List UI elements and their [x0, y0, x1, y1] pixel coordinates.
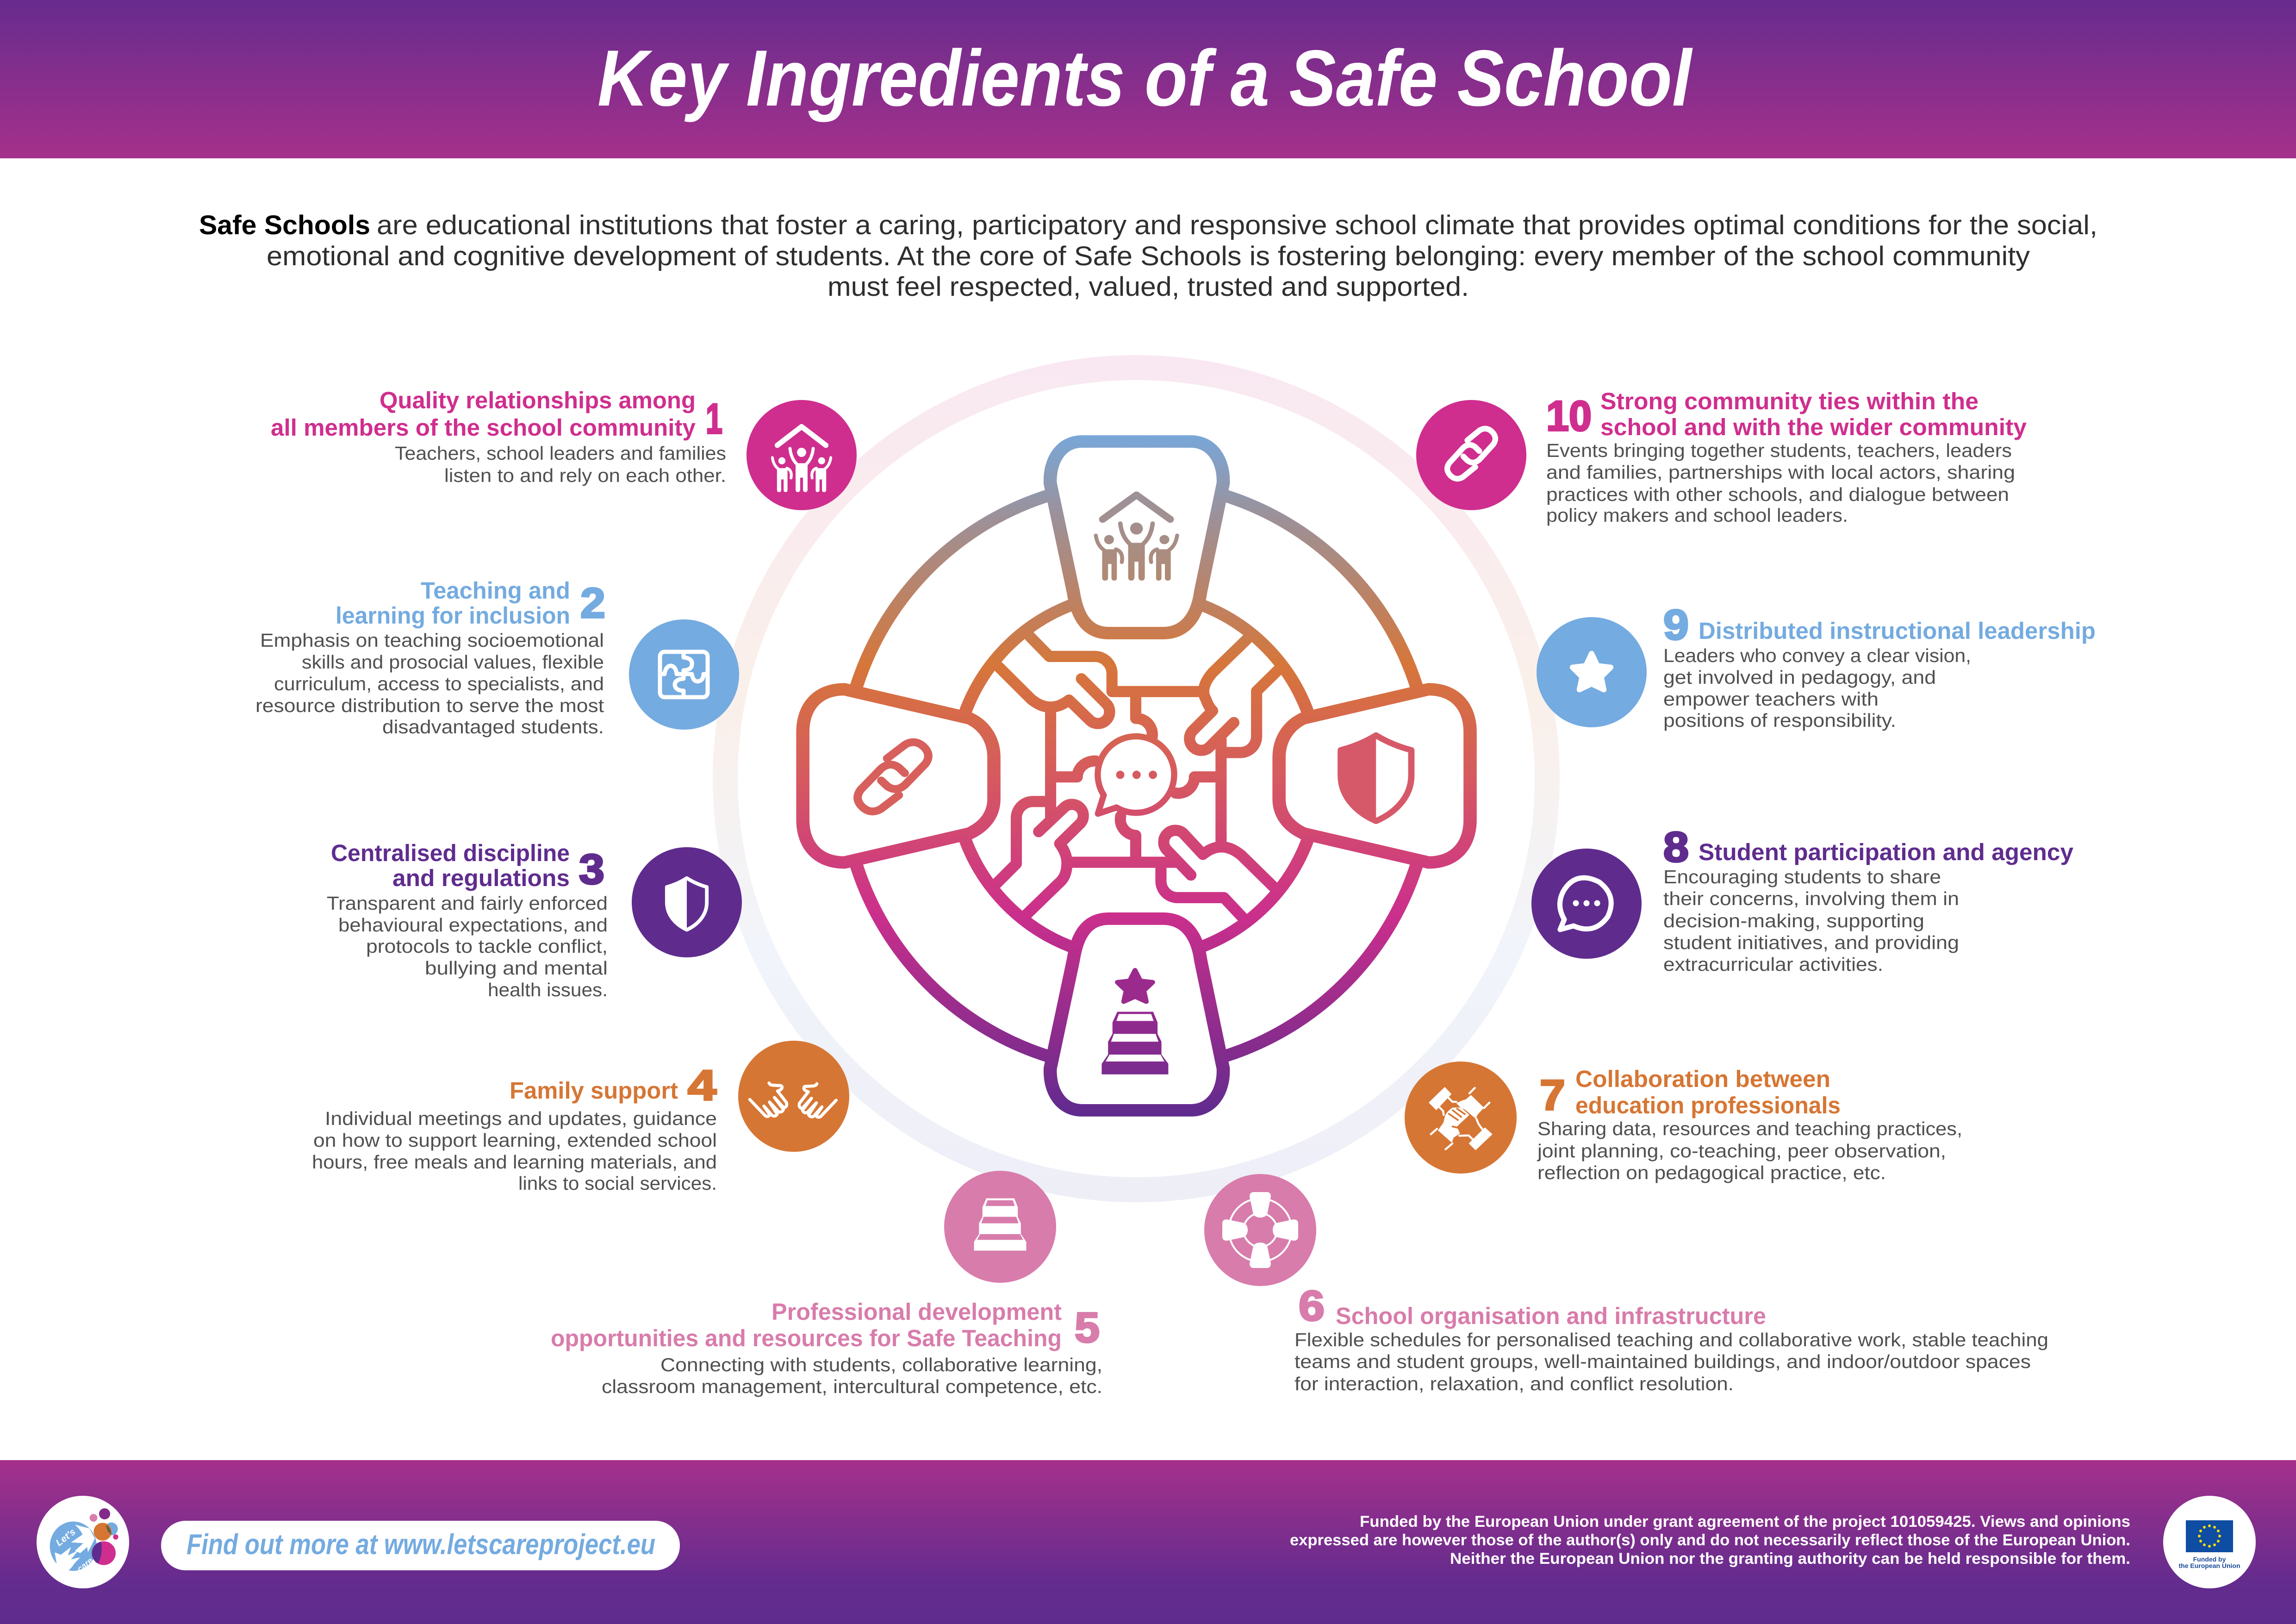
heading 5: 5	[1075, 1304, 1100, 1351]
lifebuoy rings	[842, 482, 1431, 1070]
text 1: listen to and rely on each other.	[444, 465, 726, 486]
text 9: Leaders who convey a clear vision,	[1663, 645, 1971, 666]
text 6: for interaction, relaxation, and conflict resolution.	[1294, 1373, 1734, 1394]
item 7	[1405, 1062, 1962, 1183]
icon circle 2: puzzle	[629, 619, 739, 730]
heading 6: 6	[1299, 1282, 1325, 1330]
item 4	[312, 1041, 849, 1194]
heading 9	[1663, 601, 2096, 649]
text 3: protocols to tackle conflict,	[366, 936, 608, 957]
heading 5: Professional development	[772, 1299, 1062, 1325]
icon: people under roof	[1096, 495, 1177, 581]
text 4: Individual meetings and updates, guidance	[325, 1108, 717, 1129]
heading 9: Distributed instructional leadership	[1699, 618, 2096, 644]
text 8: decision-making, supporting	[1663, 910, 1924, 931]
icon: chain link	[858, 742, 928, 812]
item 10	[1416, 388, 2027, 526]
icon: star	[1117, 970, 1153, 1002]
central puzzle with four hands	[997, 637, 1278, 918]
text 7	[1537, 1118, 1962, 1183]
heading 10	[1546, 388, 2027, 440]
EU emblem: the European Union	[2179, 1562, 2240, 1569]
heading 8	[1663, 824, 2074, 871]
heading 4: 4	[688, 1062, 716, 1109]
text 4: links to social services.	[518, 1173, 717, 1194]
card: bottom	[1050, 918, 1223, 1110]
funding disclaimer: expressed are however those of the author(s) only and do not necessarily reflect those of the European Union.	[1290, 1531, 2130, 1549]
text 7: Sharing data, resources and teaching practices,	[1537, 1118, 1962, 1139]
card: right	[1279, 689, 1470, 862]
icon circle 1	[747, 400, 857, 510]
card: left	[803, 689, 994, 862]
heading 10: 10	[1546, 393, 1592, 440]
heading 2: 2	[580, 580, 605, 627]
heading 8: Student participation and agency	[1699, 839, 2074, 865]
text 2	[255, 630, 604, 737]
text 9	[1663, 645, 1971, 731]
text 9: positions of responsibility.	[1663, 710, 1896, 731]
text 6: teams and student groups, well-maintained buildings, and indoor/outdoor spaces	[1294, 1351, 2031, 1372]
text 4: hours, free meals and learning materials, and	[312, 1151, 717, 1173]
heading 1: all members of the school community	[271, 414, 696, 441]
EU emblem: Funded by	[2193, 1555, 2226, 1563]
heading 7	[1540, 1066, 1841, 1119]
text 10: Events bringing together students, teachers, leaders	[1546, 440, 2012, 461]
text 2: skills and prosocial values, flexible	[302, 651, 604, 673]
item 1	[271, 387, 857, 510]
text 8: extracurricular activities.	[1663, 954, 1883, 975]
project logo: Let's	[54, 1526, 78, 1549]
card: top	[1050, 442, 1223, 633]
text 10: policy makers and school leaders.	[1546, 505, 1848, 526]
heading 2: Teaching and	[421, 577, 570, 604]
text 3: Transparent and fairly enforced	[327, 893, 608, 914]
website pill: Find out more at www.letscareproject.eu	[187, 1529, 655, 1561]
heading 4	[510, 1062, 716, 1109]
heading 6: School organisation and infrastructure	[1336, 1303, 1766, 1329]
icon circle 7: joined hands	[1405, 1062, 1517, 1174]
EU emblem	[2163, 1496, 2256, 1588]
text 2: Emphasis on teaching socioemotional	[260, 630, 604, 651]
text 8: Encouraging students to share	[1663, 866, 1941, 887]
icon circle 8: speech bubble	[1531, 849, 1642, 959]
icon circle 4: hands	[738, 1041, 849, 1152]
text 8: student initiatives, and providing	[1663, 932, 1959, 953]
heading 3: and regulations	[392, 865, 570, 891]
item 9	[1537, 601, 2096, 731]
icon: stairs	[1101, 1012, 1168, 1074]
footer band	[0, 1460, 2296, 1624]
heading 8: 8	[1663, 824, 1689, 871]
text 4	[312, 1108, 717, 1194]
heading 10: Strong community ties within the	[1600, 388, 1979, 414]
text 3: health issues.	[488, 979, 608, 1000]
heading 7: 7	[1540, 1072, 1565, 1119]
intro paragraph: emotional and cognitive development of students. At the core of Safe Schools is fostering belonging: every member of the school community	[267, 241, 2030, 271]
text 1	[395, 443, 726, 486]
text 3: behavioural expectations, and	[338, 914, 608, 936]
heading 10: school and with the wider community	[1600, 414, 2027, 440]
text 8	[1663, 866, 1959, 975]
text 9: get involved in pedagogy, and	[1663, 667, 1936, 688]
icon: shield	[1341, 735, 1411, 821]
text 3	[327, 893, 608, 1000]
project logo: care	[75, 1556, 94, 1574]
project logo	[37, 1496, 129, 1588]
item 8	[1531, 824, 2074, 975]
heading 1: 1	[706, 395, 722, 443]
text 7: reflection on pedagogical practice, etc.	[1537, 1162, 1886, 1183]
text 1: Teachers, school leaders and families	[395, 443, 726, 464]
heading 1: Quality relationships among	[380, 387, 696, 413]
text 10: and families, partnerships with local actors, sharing	[1546, 462, 2015, 483]
heading 1	[271, 387, 722, 443]
heading 5	[551, 1299, 1100, 1351]
speech bubble	[1098, 737, 1174, 814]
item 6	[1204, 1174, 2048, 1394]
pale outer ring	[725, 368, 1547, 1190]
title: Key Ingredients of a Safe School	[597, 34, 1693, 123]
text 9: empower teachers with	[1663, 688, 1879, 710]
icon circle 6: lifebuoy	[1204, 1174, 1316, 1286]
text 10	[1546, 440, 2015, 526]
text 6	[1294, 1329, 2048, 1394]
central lifebuoy graphic	[803, 442, 1470, 1110]
intro paragraph	[199, 210, 2097, 302]
text 2: resource distribution to serve the most	[255, 695, 604, 716]
item 5	[551, 1171, 1102, 1397]
heading 2: learning for inclusion	[336, 602, 570, 629]
item 2	[255, 577, 739, 737]
icon circle 10: link	[1416, 400, 1526, 510]
text 2: disadvantaged students.	[382, 716, 604, 737]
website pill	[161, 1521, 680, 1570]
funding disclaimer: Neither the European Union nor the granting authority can be held responsible for them.	[1450, 1550, 2130, 1568]
text 8: their concerns, involving them in	[1663, 888, 1959, 909]
heading 6	[1299, 1282, 1766, 1330]
heading 5: opportunities and resources for Safe Teaching	[551, 1325, 1062, 1351]
icon circle 9: star	[1537, 617, 1647, 727]
heading 2	[336, 577, 605, 629]
heading 9: 9	[1663, 601, 1689, 649]
text 5	[602, 1354, 1102, 1397]
heading 4: Family support	[510, 1077, 678, 1104]
item 3	[327, 840, 742, 1000]
heading 3: 3	[579, 846, 604, 893]
text 5: classroom management, intercultural competence, etc.	[602, 1376, 1102, 1397]
text 2: curriculum, access to specialists, and	[274, 673, 604, 694]
heading 7: Collaboration between	[1575, 1066, 1830, 1092]
text 10: practices with other schools, and dialogue between	[1546, 484, 2009, 505]
heading 7: education professionals	[1575, 1092, 1841, 1118]
text 3: bullying and mental	[425, 957, 608, 979]
intro paragraph: Safe Schools	[199, 210, 370, 240]
heading 3: Centralised discipline	[331, 840, 570, 866]
icon circle 5: stairs	[944, 1171, 1056, 1283]
text 4: on how to support learning, extended school	[313, 1130, 717, 1151]
header band	[0, 0, 2296, 158]
text 7: joint planning, co-teaching, peer observation,	[1537, 1140, 1946, 1162]
funding disclaimer: Funded by the European Union under grant agreement of the project 101059425. Views and opinions	[1360, 1513, 2130, 1530]
funding disclaimer	[1290, 1513, 2130, 1568]
four cards and their icons	[803, 442, 1470, 1110]
text 6: Flexible schedules for personalised teaching and collaborative work, stable teaching	[1294, 1329, 2048, 1350]
intro paragraph: are educational institutions that foster a caring, participatory and responsive school climate that provides optimal conditions for the social,	[377, 210, 2097, 240]
text 5: Connecting with students, collaborative learning,	[660, 1354, 1102, 1375]
heading 3	[331, 840, 604, 893]
icon circle 3: shield	[632, 847, 742, 957]
intro paragraph: must feel respected, valued, trusted and supported.	[828, 272, 1469, 302]
